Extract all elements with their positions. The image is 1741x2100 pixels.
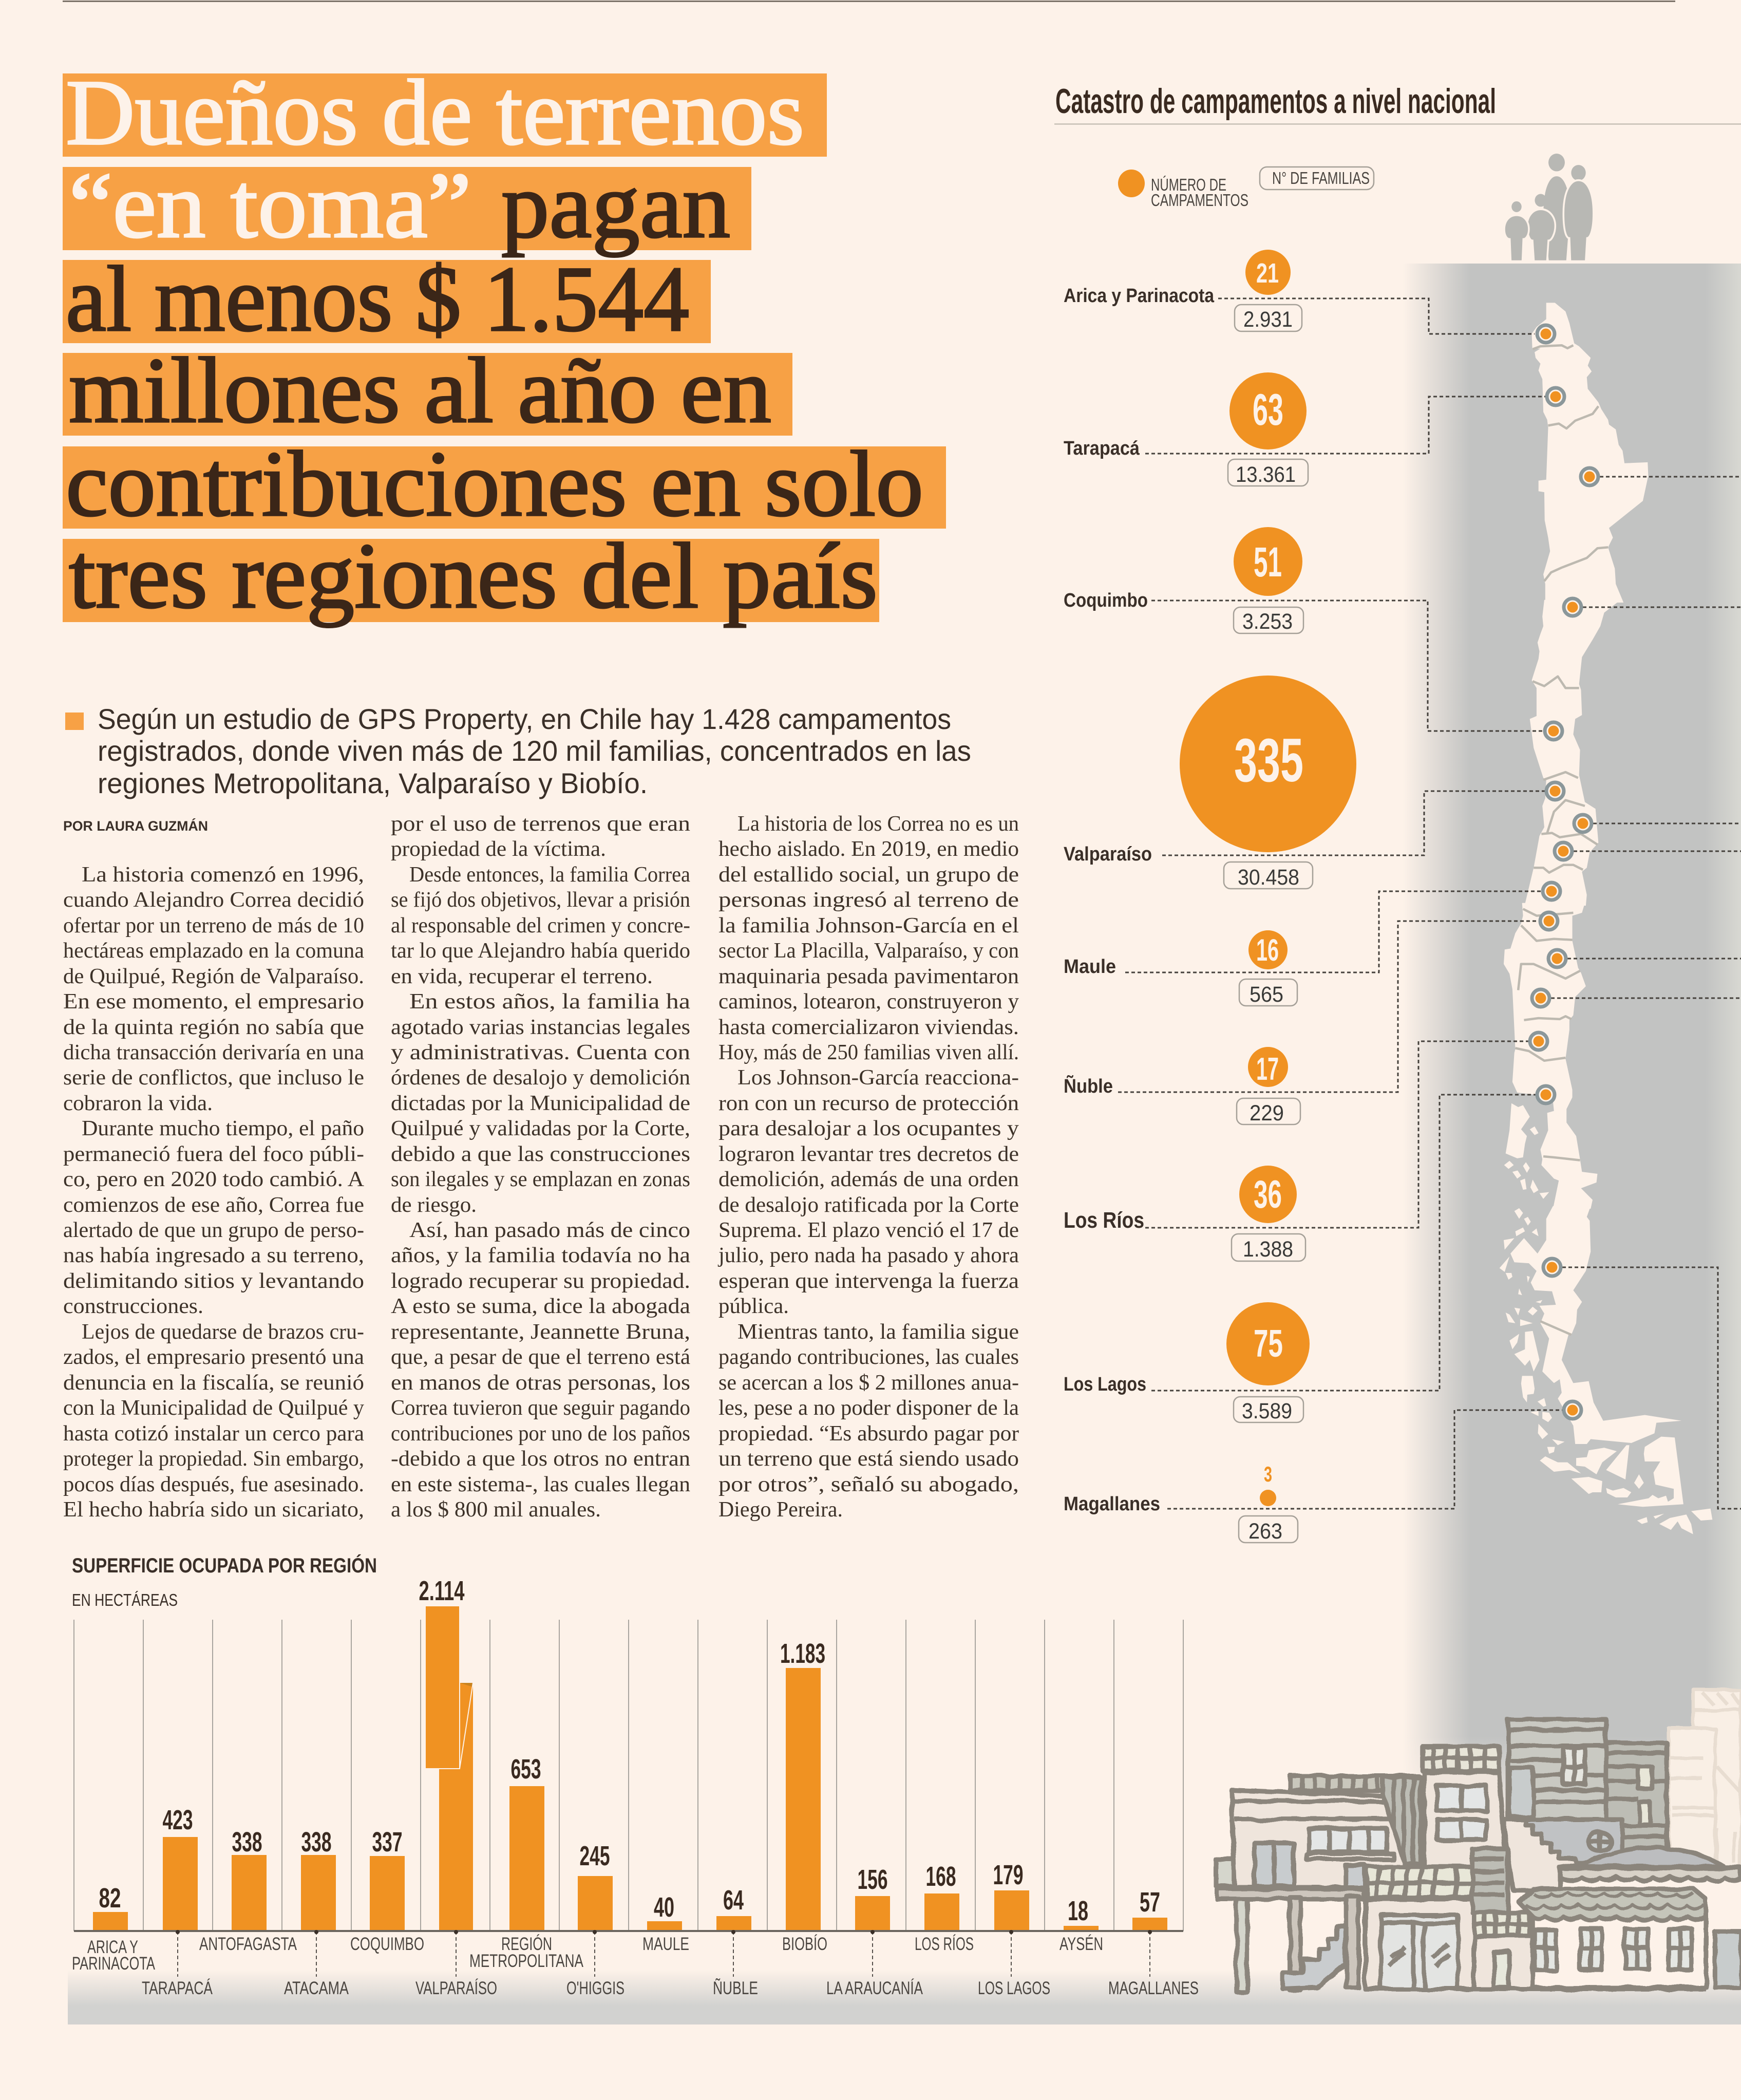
region axis labels: ATACAMA [284, 1978, 349, 1998]
title: Dueños de terrenos [66, 61, 804, 164]
article text: column 2: que, a pesar de que el terreno está [391, 1345, 690, 1369]
stairs wall [1504, 1820, 1578, 1890]
article text: column 1: permaneció fuera del foco públi- [63, 1142, 364, 1166]
article text: column 2 [391, 812, 690, 1522]
title: contribuciones en solo [66, 433, 923, 536]
long house [1533, 1917, 1706, 1988]
region: Valparaíso: 30.458 [1238, 865, 1299, 890]
region: Ñuble: 17 [1256, 1052, 1279, 1087]
region: Valparaíso [1064, 676, 1356, 890]
subheading: Según un estudio de GPS Property, en Chile hay 1.428 campamentos [98, 703, 951, 735]
article text: column 3: maquinaria pesada pavimentaron [718, 965, 1019, 988]
title: al menos $ 1.544 [66, 248, 689, 351]
value labels: 2.114 [419, 1576, 464, 1606]
article text: column 2: en este sistema-, las cuales llegan [391, 1473, 690, 1496]
article text: column 3: Hoy, más de 250 familias viven allí. [718, 1041, 1019, 1064]
arched awning [1578, 1848, 1724, 1867]
title: tres regiones del país [69, 524, 878, 628]
article text: column 1: cuando Alejandro Correa decidió [63, 888, 364, 912]
article text: column 3: les, pese a no poder disponer de la [718, 1396, 1019, 1420]
article text: column 2: tar lo que Alejandro había querido [391, 939, 690, 963]
subheading: registrados, donde viven más de 120 mil familias, concentrados en las [98, 735, 971, 767]
map heading: Catastro de campamentos a nivel nacional [1055, 82, 1496, 121]
article text: column 3: propiedad. “Es absurdo pagar por [718, 1422, 1019, 1446]
article text: column 2: Correa tuvieron que seguir pagando [391, 1396, 690, 1420]
region axis labels: METROPOLITANA [469, 1951, 583, 1971]
article text: column 3: Diego Pereira. [718, 1498, 843, 1522]
region: Maule [1064, 930, 1297, 1007]
value labels [99, 1576, 1160, 1926]
article text: column 2: representante, Jeannette Bruna, [391, 1320, 690, 1344]
article text: column 1: denuncia en la fiscalía, se reunió [63, 1371, 364, 1395]
article text: column 2: a los $ 800 mil anuales. [391, 1498, 601, 1522]
value labels: 57 [1140, 1887, 1160, 1918]
region: Los Ríos: 36 [1254, 1173, 1282, 1216]
region: Ñuble: Ñuble [1064, 1075, 1113, 1097]
panel: map background [1387, 264, 1741, 1836]
value labels: 64 [723, 1885, 744, 1916]
title: millones al año en [69, 339, 771, 442]
article text: column 1: zados, el empresario presentó una [63, 1345, 364, 1369]
subheading: regiones Metropolitana, Valparaíso y Biobío. [98, 767, 648, 799]
article text: column 3: Los Johnson-García reacciona- [737, 1066, 1019, 1090]
article text: column 1: hectáreas emplazado en la comuna [63, 939, 364, 963]
value labels: 338 [301, 1827, 332, 1858]
article text: column 2: agotado varias instancias legales [391, 1016, 690, 1039]
article text: column 1: alertado de que un grupo de perso- [63, 1218, 364, 1242]
connector lines [1118, 298, 1741, 1509]
article text: column 3: caminos, lotearon, construyeron y [718, 990, 1019, 1014]
article text: column 2: son ilegales y se emplazan en zonas [391, 1168, 690, 1191]
region axis labels: MAGALLANES [1108, 1978, 1199, 1998]
legend: NÚMERO DE [1151, 175, 1226, 194]
central regions [1525, 600, 1621, 906]
region axis labels: ÑUBLE [713, 1978, 758, 1998]
chart heading: EN HECTÁREAS [72, 1590, 178, 1609]
region axis labels: LA ARAUCANÍA [826, 1978, 923, 1998]
title [63, 61, 946, 628]
region: Coquimbo [1064, 527, 1303, 634]
article text: column 1: ofertar por un terreno de más de 10 [63, 914, 364, 938]
article text: column 3: por otros”, señaló su abogado, [718, 1473, 1019, 1496]
value labels: 18 [1068, 1896, 1088, 1926]
region axis labels [72, 1934, 1199, 1998]
region: Maule: 565 [1250, 982, 1283, 1007]
article text: column 1: de la quinta región no sabía que [63, 1016, 364, 1039]
article text: column 2: al responsable del crimen y concre- [391, 914, 690, 938]
article text: column 3: hecho aislado. En 2019, en medio [718, 837, 1019, 861]
region: Arica y Parinacota: 2.931 [1243, 307, 1293, 332]
article text: column 3: personas ingresó al terreno de [718, 888, 1019, 912]
patagonia [1500, 1206, 1681, 1444]
region: Maule: 16 [1256, 933, 1279, 967]
article text: column 1: serie de conflictos, que incluso le [63, 1066, 364, 1090]
value labels: 337 [372, 1827, 403, 1858]
article text: column 2: en manos de otras personas, los [391, 1371, 690, 1395]
region: Arica y Parinacota [1064, 250, 1302, 332]
article text: column 1: cobraron la vida. [63, 1092, 213, 1115]
article text: column 2: A esto se suma, dice la abogada [391, 1295, 690, 1318]
southern central regions [1504, 903, 1597, 1209]
article text: column 1 [63, 863, 365, 1522]
article text: column 3: Suprema. El plazo venció el 17 de [718, 1218, 1019, 1242]
legend: CAMPAMENTOS [1151, 191, 1248, 210]
article text: column 3: de desalojo ratificada por la Corte [718, 1193, 1019, 1217]
title: “en toma” [69, 154, 471, 257]
striped back buildings [1508, 1719, 1606, 1820]
article text: column 2: En estos años, la familia ha [409, 990, 690, 1014]
region: Tarapacá: Tarapacá [1064, 438, 1140, 459]
title: pagan [501, 154, 730, 257]
article text: column 2: órdenes de desalojo y demolición [391, 1066, 690, 1090]
region axis labels: PARINACOTA [72, 1954, 155, 1974]
article text: column 2: contribuciones por uno de los paños [391, 1422, 690, 1446]
bars [93, 1668, 1167, 1931]
region axis labels: ANTOFAGASTA [199, 1934, 297, 1954]
value labels: 423 [162, 1805, 193, 1835]
region: Los Ríos: Los Ríos [1064, 1208, 1144, 1233]
region: Arica y Parinacota: 21 [1256, 258, 1279, 289]
region: Los Lagos [1064, 1302, 1310, 1423]
value labels: 338 [232, 1827, 262, 1858]
article text: column 3: un terreno que está siendo usado [718, 1447, 1019, 1471]
region: Tarapacá: 13.361 [1236, 462, 1296, 487]
region: Tarapacá [1064, 372, 1308, 487]
article text: column 2: Desde entonces, la familia Correa [409, 863, 690, 887]
region axis labels: MAULE [642, 1934, 689, 1954]
value labels: 653 [510, 1754, 541, 1785]
article text: column 1: construcciones. [63, 1295, 203, 1318]
region: Los Ríos: 1.388 [1243, 1237, 1293, 1262]
region axis labels: TARAPACÁ [142, 1978, 213, 1998]
article text: column 1: Lejos de quedarse de brazos cru- [82, 1320, 364, 1344]
article text: column 2: se fijó dos objetivos, llevar a prisión [391, 888, 690, 912]
map of Chile [1500, 303, 1712, 1534]
region axis labels: AYSÉN [1059, 1934, 1103, 1954]
value labels: 168 [925, 1861, 956, 1892]
article text: column 3: ron con un recurso de protección [718, 1092, 1019, 1115]
byline: POR LAURA GUZMÁN [63, 818, 208, 834]
article text: column 3: julio, pero nada ha pasado y ahora [717, 1244, 1019, 1267]
article text: column 1: El hecho habría sido un sicariato, [63, 1498, 364, 1522]
centre house [1367, 1867, 1472, 1898]
left house [1290, 1776, 1418, 1791]
illustration: shanty houses [1216, 1690, 1741, 1992]
article text: column 1: co, pero en 2020 todo cambió. A [63, 1168, 365, 1191]
ghost houses [1669, 1690, 1741, 1876]
article text: column 2: y administrativas. Cuenta con [391, 1041, 690, 1064]
Valparaíso broken bar [425, 1606, 473, 1769]
bar chart [72, 1576, 1199, 1998]
article text: column 3: para desalojar a los ocupantes y [718, 1117, 1019, 1140]
region: Los Ríos [1064, 1166, 1305, 1262]
article text: column 2: por el uso de terrenos que eran [391, 812, 690, 836]
region axis labels: COQUIMBO [350, 1934, 424, 1954]
article text: column 1: delimitando sitios y levantando [63, 1269, 364, 1293]
article text: column 3: pública. [718, 1295, 789, 1318]
article text: column 3: Mientras tanto, la familia sigue [737, 1320, 1019, 1344]
region: Tarapacá: 63 [1253, 385, 1283, 435]
region: Magallanes: 3 [1264, 1462, 1272, 1486]
article text: column 1: Durante mucho tiempo, el paño [82, 1117, 364, 1140]
region axis labels: BIOBÍO [782, 1934, 827, 1954]
value labels: 82 [99, 1883, 121, 1914]
legend [1118, 167, 1374, 210]
subheading [65, 703, 971, 799]
legend: N° DE FAMILIAS [1272, 168, 1370, 188]
article text: column 1: comienzos de ese año, Correa fue [63, 1193, 364, 1217]
article text: column 3: se acercan a los $ 2 millones anua- [718, 1371, 1019, 1395]
article text: column 1: hasta cotizó instalar un cerco para [63, 1422, 364, 1446]
value labels: 40 [654, 1892, 674, 1923]
region: Los Lagos: 3.589 [1242, 1399, 1292, 1423]
chart heading [72, 1553, 377, 1609]
chart heading: SUPERFICIE OCUPADA POR REGIÓN [72, 1553, 377, 1577]
region: Coquimbo: 3.253 [1242, 609, 1293, 634]
article text: column 3: hasta comercializaron viviendas. [718, 1016, 1019, 1039]
magallanes islands [1521, 1376, 1712, 1534]
article text: column 1: proteger la propiedad. Sin embargo, [63, 1447, 364, 1471]
article text: column 1: con la Municipalidad de Quilpué y [63, 1396, 364, 1420]
region: Magallanes [1064, 1462, 1298, 1544]
region: Coquimbo: Coquimbo [1064, 590, 1148, 611]
icon: family silhouettes [1504, 154, 1594, 261]
article text: column 2: Quilpué y validadas por la Corte, [391, 1117, 690, 1140]
article text: column 3: la familia Johnson-García en el [718, 914, 1019, 938]
value labels: 245 [579, 1841, 610, 1871]
article text: column 2: debido a que las construcciones [391, 1142, 690, 1166]
article text: column 2: dictadas por la Municipalidad de [391, 1092, 690, 1115]
article text: column 3: esperan que intervenga la fuerza [718, 1269, 1019, 1293]
article text: column 2: logrado recuperar su propiedad. [391, 1269, 690, 1293]
region: Arica y Parinacota: Arica y Parinacota [1064, 285, 1215, 307]
article text: column 1: La historia comenzó en 1996, [82, 863, 364, 887]
tick marks [176, 1930, 1152, 1977]
article text: column 1: dicha transacción derivaría en una [63, 1041, 364, 1064]
region: Coquimbo: 51 [1254, 539, 1282, 586]
article text: column 2: en vida, recuperar el terreno. [391, 965, 653, 988]
right stripes [1472, 1849, 1508, 1913]
article text: column 3: demolición, además de una orden [718, 1168, 1019, 1191]
region: Magallanes: 263 [1248, 1519, 1282, 1544]
map location markers [1530, 325, 1598, 1419]
article text: column 1: En ese momento, el empresario [63, 990, 364, 1014]
article text: column 1: de Quilpué, Región de Valparaíso. [63, 965, 364, 988]
region axis labels: ARICA Y [87, 1937, 138, 1957]
region: Los Lagos: 75 [1254, 1322, 1283, 1365]
article text: column 3: lograron levantar tres decretos de [718, 1142, 1019, 1166]
region: Magallanes: Magallanes [1064, 1493, 1160, 1515]
north regions [1532, 303, 1648, 603]
region: Maule: Maule [1064, 956, 1116, 978]
article text: column 3: pagando contribuciones, las cuales [718, 1345, 1019, 1369]
article text: column 2: Así, han pasado más de cinco [409, 1218, 690, 1242]
region axis labels: REGIÓN [501, 1934, 552, 1954]
article text: column 3: La historia de los Correa no es un [737, 812, 1019, 836]
region axis labels: LOS RÍOS [915, 1934, 974, 1954]
article text: column 3: sector La Placilla, Valparaíso, y con [718, 939, 1019, 963]
region: Ñuble [1064, 1047, 1300, 1126]
region axis labels: O'HIGGIS [566, 1978, 625, 1998]
region: Valparaíso: Valparaíso [1064, 843, 1152, 865]
region: Valparaíso: 335 [1234, 726, 1303, 795]
article text: column 3: del estallido social, un grupo de [718, 863, 1019, 887]
article text: column 2: de riesgo. [391, 1193, 477, 1217]
region axis labels: LOS LAGOS [978, 1978, 1050, 1998]
bottom ground band [68, 1970, 1741, 2024]
article text: column 1: nas había ingresado a su terreno, [63, 1244, 364, 1267]
region: Los Lagos: Los Lagos [1064, 1374, 1146, 1395]
article text: column 3 [717, 812, 1019, 1522]
region axis labels: VALPARAÍSO [415, 1978, 497, 1998]
value labels: 179 [993, 1860, 1023, 1890]
article text: column 2: años, y la familia todavía no ha [391, 1244, 690, 1267]
article text: column 2: propiedad de la víctima. [391, 837, 606, 861]
article text: column 2: -debido a que los otros no entran [391, 1447, 690, 1471]
mid tower [1422, 1747, 1499, 1771]
region: Ñuble: 229 [1250, 1101, 1284, 1126]
value labels: 156 [858, 1864, 887, 1895]
article text: column 1: pocos días después, fue asesinado. [63, 1473, 364, 1496]
value labels: 1.183 [780, 1638, 825, 1669]
